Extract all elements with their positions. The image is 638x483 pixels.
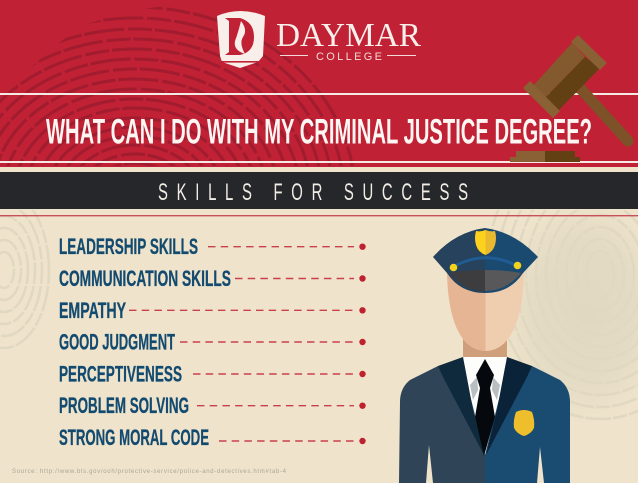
gavel handle: [580, 88, 628, 141]
red rule: [0, 215, 638, 216]
police officer: [399, 228, 570, 483]
skill: strong moral code: STRONG MORAL CODE: [59, 425, 209, 450]
collar shadow: [470, 377, 500, 400]
logo: [217, 11, 421, 68]
hat visor: [450, 270, 521, 291]
banner heading: SKILLS FOR SUCCESS: [158, 180, 468, 206]
cream fingerprint backgrounds: [0, 210, 638, 420]
face: [447, 262, 524, 351]
lapels: [438, 357, 532, 455]
skill: empathy: EMPATHY: [59, 298, 126, 323]
shirt: [463, 357, 507, 455]
skills list: [59, 234, 366, 450]
logo subtitle: [280, 51, 416, 63]
skill: empathy: [59, 298, 366, 323]
hat band: [453, 258, 517, 267]
logo wordmark: DAYMAR: [276, 17, 421, 54]
tie: [475, 359, 495, 456]
skill: good judgment: [59, 330, 366, 354]
white rules: [0, 93, 638, 163]
neck: [463, 335, 507, 360]
fingerprint in header: [0, 6, 354, 166]
icon: gavel: [510, 35, 628, 162]
hat badge: [475, 230, 496, 255]
cover for unprinted top-left corner: [0, 0, 200, 100]
skill: leadership: LEADERSHIP SKILLS: [59, 234, 198, 259]
source note: Source: http://www.bls.gov/ooh/protective-service/police-and-detectives.htm#tab-4: [12, 469, 287, 475]
gavel base: [510, 151, 580, 162]
chest badge: [514, 410, 534, 436]
suit: [399, 366, 570, 483]
skill: perceptiveness: [59, 362, 366, 386]
logo subtitle: COLLEGE: [316, 51, 382, 63]
skill: good judgment: GOOD JUDGMENT: [59, 330, 175, 354]
skill: communication: COMMUNICATION SKILLS: [59, 266, 231, 291]
skill: problem solving: PROBLEM SOLVING: [59, 393, 189, 418]
dark banner: [0, 172, 638, 209]
skill: problem solving: [59, 393, 366, 418]
hat buttons: [450, 262, 521, 271]
gavel head: [523, 35, 607, 118]
header red band: [0, 0, 638, 167]
hat: [433, 228, 538, 293]
logo shield: [217, 11, 265, 68]
skill: perceptiveness: PERCEPTIVENESS: [59, 362, 182, 386]
